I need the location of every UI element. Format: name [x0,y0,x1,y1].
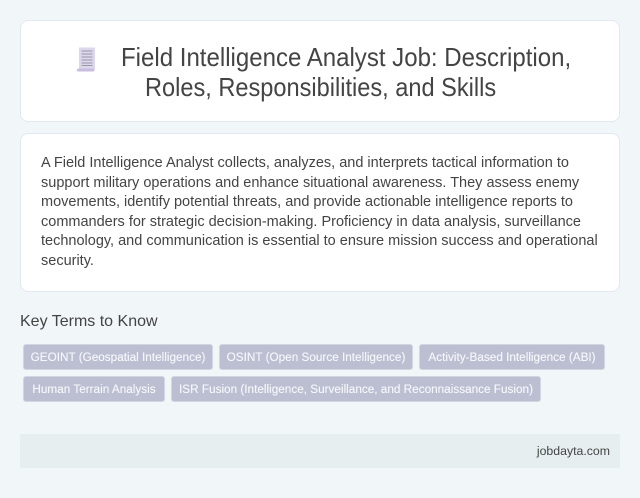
chip: ABI: Activity-Based Intelligence (ABI) [428,351,596,364]
chip: OSINT: OSINT (Open Source Intelligence) [227,351,405,364]
title: Roles, Responsibilities, and Skills [145,74,496,102]
description text [41,155,598,268]
chip: OSINT [219,344,413,370]
icon: document scroll [76,48,95,72]
description text: movements, identify potential threats, and provide actionable intelligence reports to [41,194,573,210]
chip: ABI [419,344,605,370]
footer bar [20,434,620,468]
description text: commanders for strategic decision-making. Proficiency in data analysis, surveillance [41,214,581,230]
title [121,44,571,102]
description text: support military operations and enhance situational awareness. They assess enemy [41,174,579,190]
chip: Human Terrain [23,376,165,402]
description text: A Field Intelligence Analyst collects, analyzes, and interprets tactical information to [41,155,569,171]
chip: ISR Fusion [171,376,541,402]
description text: technology, and communication is essential to ensure mission success and operational [41,233,598,249]
chip: ISR Fusion: ISR Fusion (Intelligence, Surveillance, and Reconnaissance Fusion) [179,383,533,396]
footer text: jobdayta.com [537,444,610,458]
title: Field Intelligence Analyst Job: Description, [121,44,571,72]
panel: description card [20,133,620,292]
description text: security. [41,252,94,268]
chip: GEOINT [23,344,213,370]
chip: Human Terrain: Human Terrain Analysis [32,383,156,396]
panel: header card [20,20,620,122]
heading: key terms: Key Terms to Know [20,313,158,330]
chip: GEOINT: GEOINT (Geospatial Intelligence) [31,351,205,364]
